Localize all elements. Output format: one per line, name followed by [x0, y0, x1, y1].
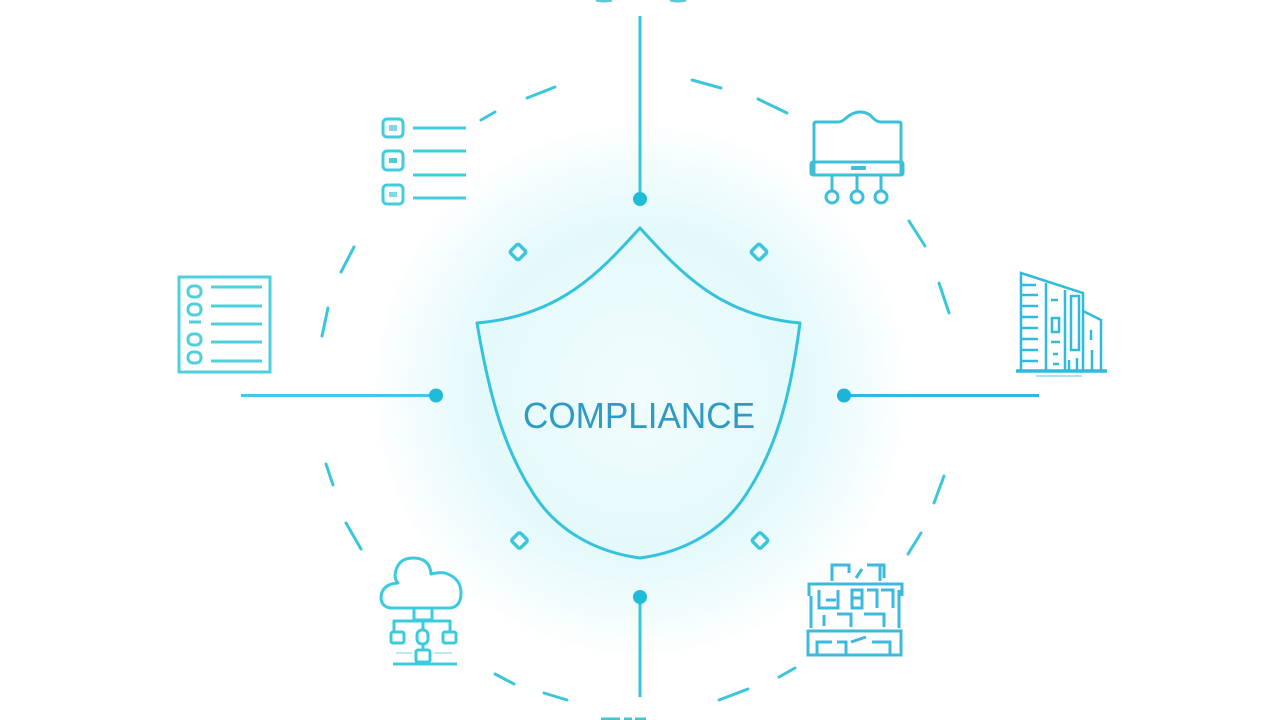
icon: checklist — [383, 119, 466, 204]
connector: left — [241, 388, 443, 402]
connector: right — [837, 388, 1039, 402]
connector: top — [633, 16, 647, 206]
cropped bottom icon — [601, 718, 646, 720]
icon: factory building — [808, 565, 902, 655]
icon: document list — [179, 277, 270, 372]
dashed ring — [322, 80, 949, 700]
connector: bottom — [633, 590, 647, 697]
icon: cloud network — [381, 558, 461, 664]
shield label: COMPLIANCE — [523, 395, 755, 436]
shield — [477, 228, 800, 558]
icon: office building — [1016, 273, 1107, 376]
diamond markers — [510, 244, 768, 549]
icon: cloud server — [811, 112, 903, 203]
cropped top icon — [596, 0, 686, 1]
central glow — [370, 120, 910, 660]
